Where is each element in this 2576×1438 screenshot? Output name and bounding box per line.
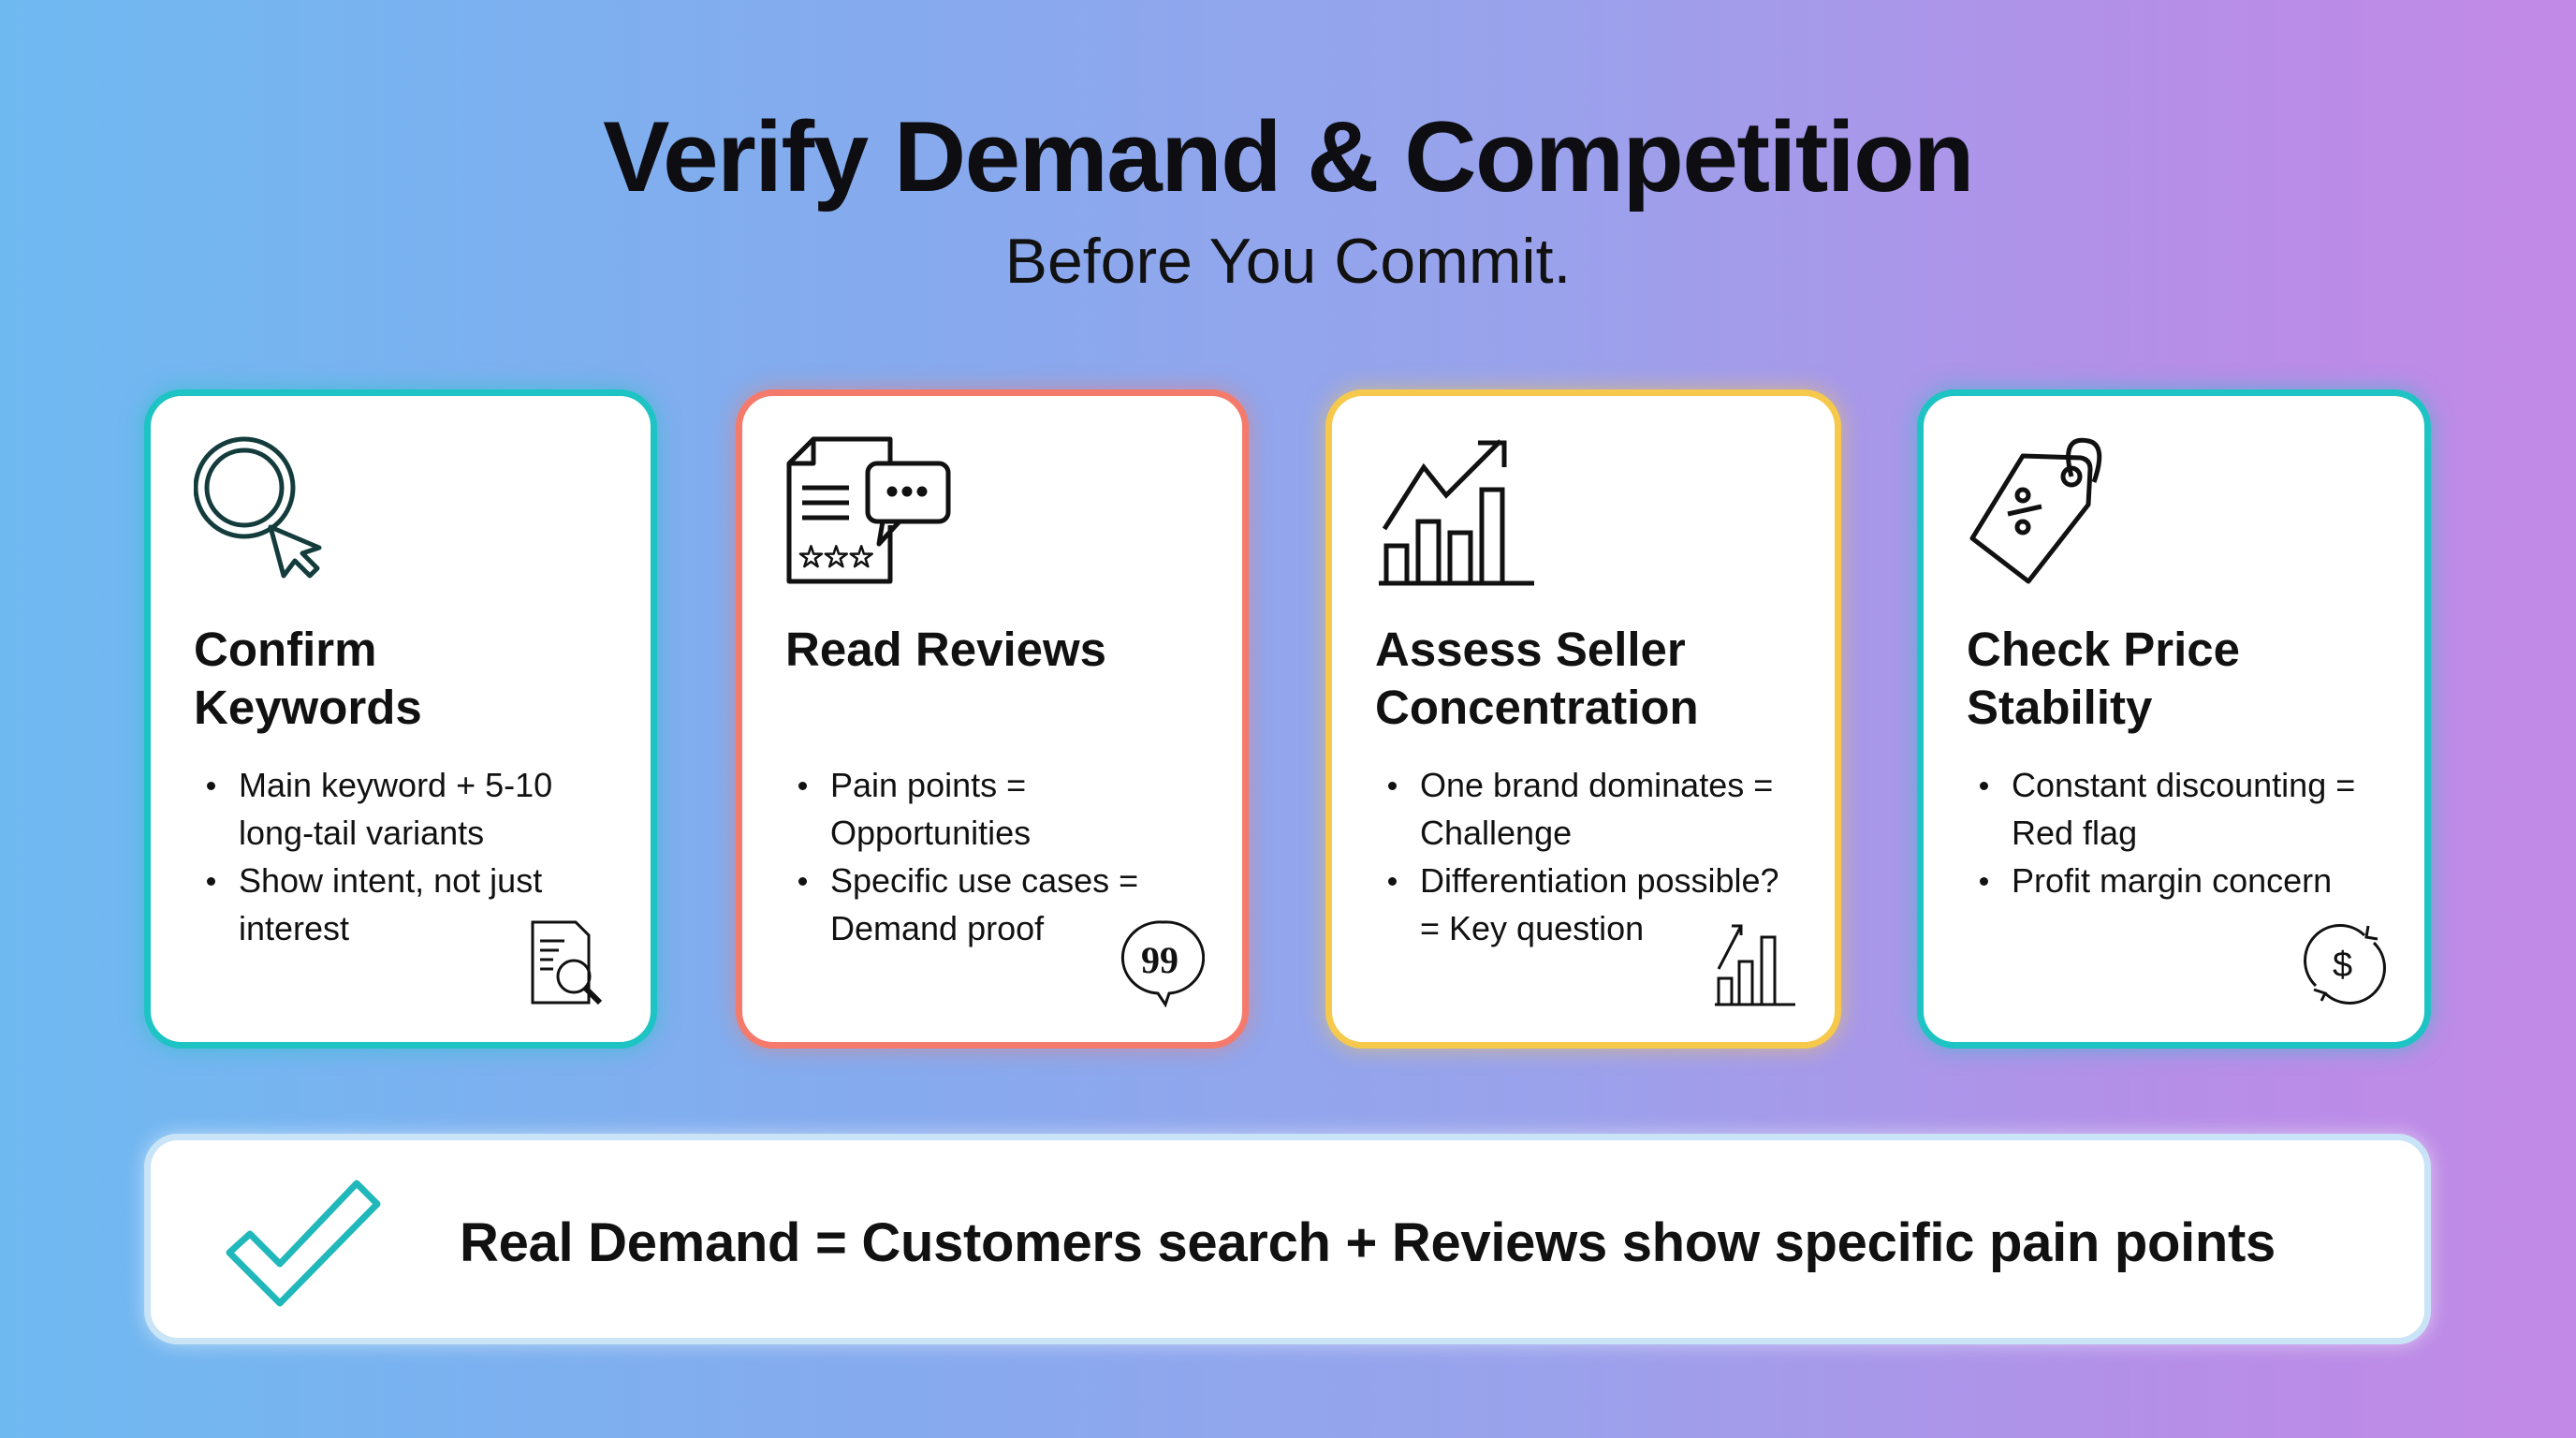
- panel: read reviews: [736, 389, 1249, 1049]
- icon: dollar cycle: $: [2333, 946, 2352, 985]
- bullets: Main keyword + 5-10: [239, 766, 552, 804]
- heading: Keywords: [194, 681, 422, 734]
- icon: checkmark: [227, 1180, 380, 1307]
- bullets: Specific use cases =: [830, 861, 1138, 900]
- icon: magnifier with cursor: [194, 436, 322, 579]
- subtitle: Before You Commit.: [1005, 226, 1571, 297]
- banner text: Real Demand = Customers search + Reviews show specific pain points: [460, 1212, 2276, 1273]
- heading: [1375, 623, 1699, 734]
- icon: dollar cycle: [2304, 924, 2386, 1005]
- bullets: Challenge: [1420, 814, 1572, 852]
- panel: seller concentration: [1325, 389, 1841, 1049]
- heading: [194, 623, 422, 734]
- heading: Assess Seller: [1375, 623, 1686, 676]
- bullets: One brand dominates =: [1420, 766, 1773, 804]
- bullets: [207, 766, 552, 947]
- bullets: Opportunities: [830, 814, 1031, 852]
- heading: [1967, 623, 2240, 734]
- bullets: long-tail variants: [239, 814, 484, 852]
- icon: quote bubble: [1121, 920, 1205, 1007]
- bullets: = Key question: [1420, 909, 1644, 947]
- heading: Check Price: [1967, 623, 2240, 676]
- heading: Confirm: [194, 623, 376, 676]
- icon: price tag: [1969, 438, 2102, 584]
- bullets: [1980, 766, 2355, 900]
- heading: Stability: [1967, 681, 2152, 734]
- bullets: Differentiation possible?: [1420, 861, 1779, 900]
- icon: quote bubble: 99: [1141, 939, 1178, 981]
- icon: small bar chart: [1715, 925, 1795, 1005]
- bullets: Pain points =: [830, 766, 1026, 804]
- bullets: Profit margin concern: [2012, 861, 2332, 900]
- bullets: Show intent, not just: [239, 861, 542, 900]
- icon: bar chart rising: [1379, 439, 1534, 586]
- panel: price stability: [1917, 389, 2431, 1049]
- callout banner: [144, 1134, 2431, 1344]
- icon: review document with chat: [786, 436, 951, 584]
- panel: confirm keywords: [144, 389, 657, 1049]
- bullets: Constant discounting =: [2012, 766, 2355, 804]
- icon: document search: [532, 921, 603, 1005]
- icon: review document with chat: ★★★: [798, 541, 874, 574]
- bullets: Demand proof: [830, 909, 1044, 947]
- bullets: Red flag: [2012, 814, 2137, 852]
- heading: Concentration: [1375, 681, 1699, 734]
- bullets: [798, 766, 1138, 947]
- bullets: [1388, 766, 1779, 947]
- bullets: interest: [239, 909, 349, 947]
- title: Verify Demand & Competition: [603, 100, 1973, 213]
- heading: Read Reviews: [785, 623, 1106, 676]
